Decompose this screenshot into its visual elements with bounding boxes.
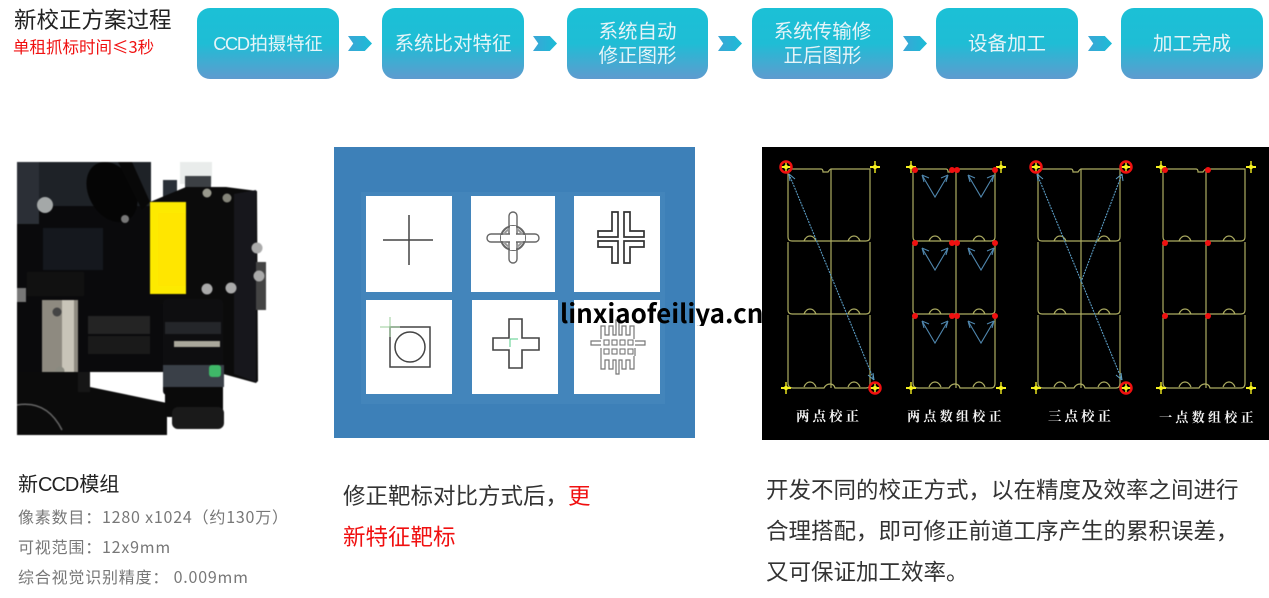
step 4: 正后图形 <box>783 44 862 66</box>
panel: correction methods <box>762 147 1269 440</box>
text block: target comparison <box>343 484 591 550</box>
method 1: two point correction <box>780 161 880 425</box>
arrow 2 <box>533 36 557 51</box>
method 2: two point array correction: 两点数组校正 <box>907 406 1005 425</box>
step 2 <box>382 8 524 79</box>
target 6: grid cross <box>574 300 660 394</box>
method 4: one point array correction: 一点数组校正 <box>1159 407 1257 426</box>
panel: target patterns <box>334 147 695 438</box>
step 3 <box>567 8 708 79</box>
subtitle: capture time: 单租抓标时间≤3秒 <box>13 34 154 58</box>
method 2: two point array correction <box>906 161 1006 425</box>
step 4 <box>752 8 893 79</box>
text block: correction methods description: 合理搭配，即可修正前道工序产生的累积误差， <box>766 519 1239 544</box>
spec: field of view: 可视范围：12x9mm <box>18 534 171 558</box>
text block: correction methods description: 开发不同的校正方式，以在精度及效率之间进行 <box>766 478 1239 503</box>
text block: correction methods description <box>766 478 1239 585</box>
step 6: 加工完成 <box>1153 32 1231 54</box>
photo: CCD module <box>16 161 267 436</box>
method 4: one point array correction <box>1156 161 1257 426</box>
step 3: 修正图形 <box>598 44 676 66</box>
arrow 4 <box>903 36 927 51</box>
text block: new CCD module: 新CCD模组 <box>18 474 119 496</box>
text block: target comparison: 新特征靶标 <box>343 525 456 550</box>
step 1 <box>197 8 339 79</box>
arrow 1 <box>348 36 372 51</box>
arrow 5 <box>1088 36 1112 51</box>
step 1: CCD拍摄特征 <box>213 32 323 54</box>
step 4: 系统传输修 <box>774 20 871 42</box>
spec: pixels: 像素数目：1280 x1024（约130万） <box>18 504 289 528</box>
target 4: square and circle <box>366 300 452 394</box>
spec: accuracy: 综合视觉识别精度： 0.009mm <box>18 564 249 588</box>
step 6 <box>1121 8 1263 79</box>
title: 新校正方案过程 <box>14 8 172 33</box>
target 1: thin cross <box>366 196 452 292</box>
text block: target comparison: 修正靶标对比方式后，更 <box>343 484 591 509</box>
step 2: 系统比对特征 <box>394 32 512 54</box>
step 5: 设备加工 <box>968 32 1046 54</box>
arrow 3 <box>718 36 742 51</box>
method 3: three point correction: 三点校正 <box>1048 405 1114 425</box>
step 3: 系统自动 <box>598 20 676 42</box>
target 2: ring cross <box>471 196 555 292</box>
step 5 <box>936 8 1078 79</box>
method 3: three point correction <box>1030 161 1132 425</box>
target 3: double cross <box>574 196 660 292</box>
target 5: solid cross <box>472 300 558 394</box>
method 1: two point correction: 两点校正 <box>796 405 862 425</box>
text block: correction methods description: 又可保证加工效率。 <box>766 560 969 585</box>
